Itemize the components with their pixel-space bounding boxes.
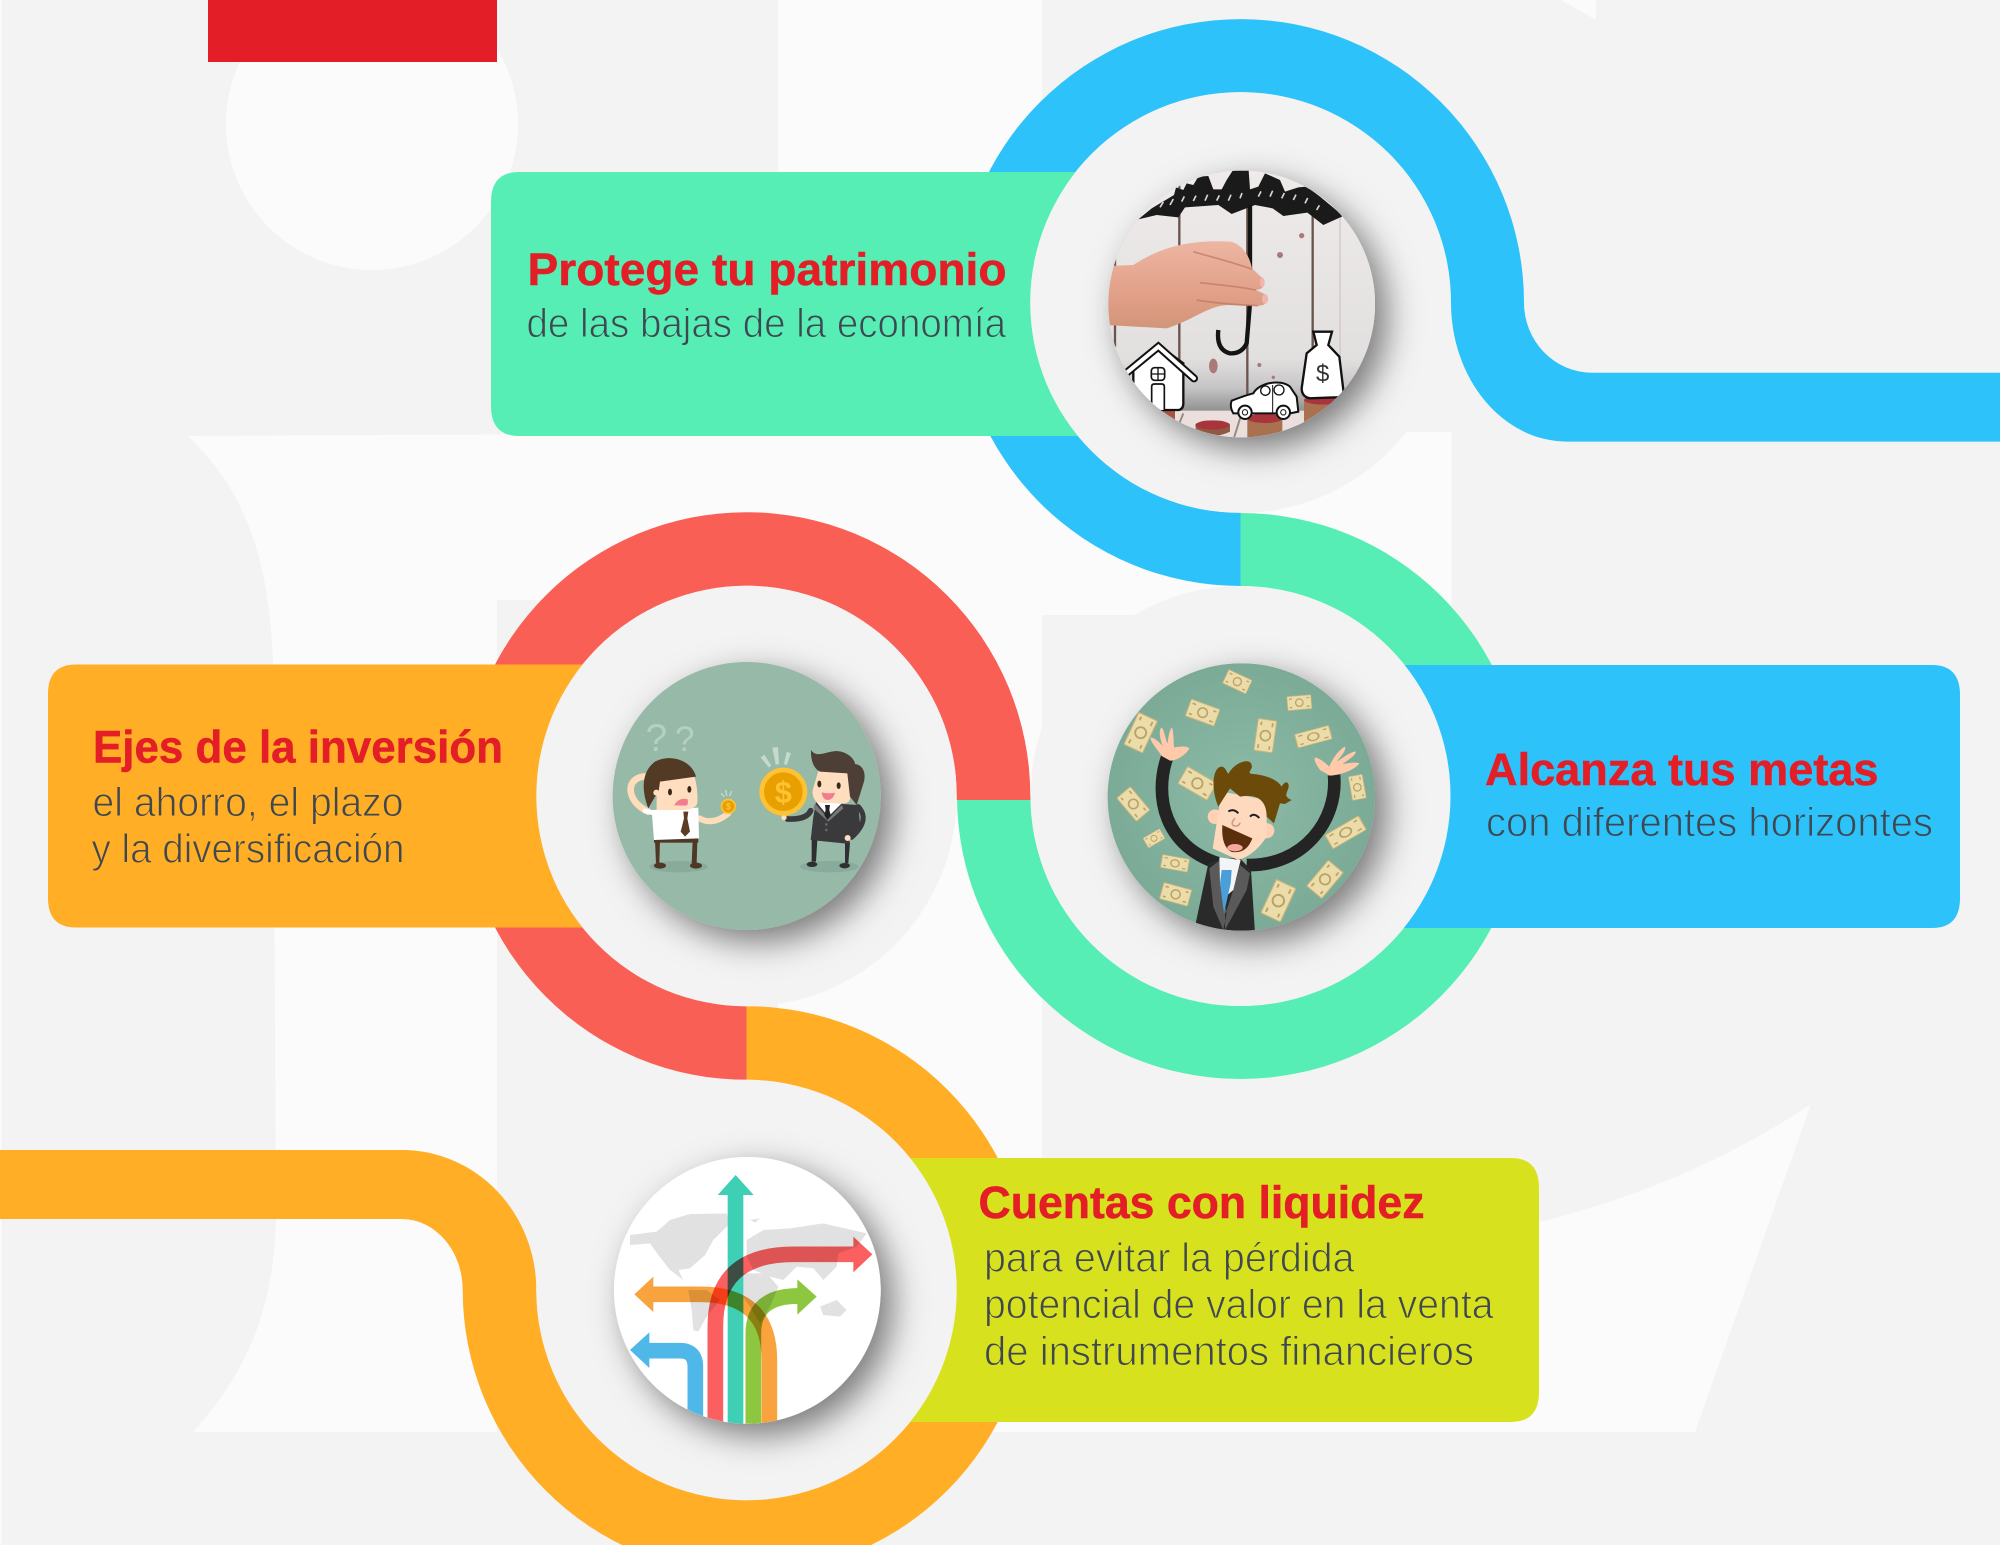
icon detail: question marks: ? xyxy=(675,720,694,759)
icon detail: falling banknotes xyxy=(1117,669,1366,922)
icon: two businessmen comparing coins xyxy=(613,662,881,930)
coral ribbon xyxy=(463,512,1030,1080)
text: cuentas con liquidez: de instrumentos financieros xyxy=(984,1328,1474,1374)
text: protege tu patrimonio xyxy=(526,244,1006,346)
panel: ejes de la inversion tab xyxy=(48,664,746,928)
icon detail: confident man in suit xyxy=(781,750,865,868)
icon detail: orange arrow xyxy=(634,1277,769,1427)
icon detail: world map xyxy=(630,1213,867,1332)
icon: umbrella protecting house, car and money xyxy=(1107,170,1377,441)
icon detail: coin stacks xyxy=(1160,395,1343,438)
text: cuentas con liquidez: potencial de valor en la venta xyxy=(984,1281,1494,1327)
panel: protege tu patrimonio tab xyxy=(491,172,1241,436)
panel: cuentas con liquidez tab xyxy=(746,1158,1539,1422)
icon detail: laughing head xyxy=(1208,761,1292,860)
text: alcanza tus metas xyxy=(1485,744,1933,845)
icon detail: hands xyxy=(1151,727,1359,776)
icon detail: hand xyxy=(1107,241,1268,328)
icon detail: green arrow xyxy=(753,1279,817,1427)
blue ribbon with tail to the right xyxy=(957,19,2000,586)
icon: world map with diverging arrows xyxy=(614,1157,881,1427)
icon detail: teal arrow xyxy=(718,1175,754,1427)
icon detail: small coin: $ xyxy=(726,802,731,812)
text: cuentas con liquidez: para evitar la pérdida xyxy=(984,1234,1355,1280)
text: cuentas con liquidez: Cuentas con liquidez xyxy=(978,1177,1424,1228)
green ribbon xyxy=(957,513,1524,1079)
text: cuentas con liquidez xyxy=(978,1177,1494,1374)
text: ejes de la inversion: Ejes de la inversión xyxy=(93,722,503,773)
icon detail: question marks xyxy=(647,724,694,751)
inner discs of the ribbon loops xyxy=(536,92,1451,1500)
text: protege tu patrimonio: Protege tu patrimonio xyxy=(528,244,1006,295)
red header block xyxy=(208,0,497,62)
icon detail: coral arrow xyxy=(715,1237,872,1427)
icon detail: house xyxy=(1126,345,1194,410)
text: alcanza tus metas: con diferentes horizontes xyxy=(1486,799,1933,845)
icon detail: umbrella xyxy=(1138,171,1343,353)
icon detail: question marks: ? xyxy=(646,717,667,760)
text: ejes de la inversion: el ahorro, el plazo xyxy=(92,779,404,825)
icon detail: small coin xyxy=(721,790,736,814)
icon detail: money bag: $ xyxy=(1316,361,1329,388)
icon: happy man under falling money xyxy=(1108,663,1375,933)
icon detail: large coin xyxy=(759,747,807,816)
icon detail: large coin: $ xyxy=(775,776,792,810)
text: protege tu patrimonio: de las bajas de la economía xyxy=(526,300,1006,346)
icon detail: suit and tie xyxy=(1195,857,1255,933)
icon detail: raised arms xyxy=(1162,757,1334,865)
text: ejes de la inversion: y la diversificación xyxy=(92,826,404,872)
text: ejes de la inversion xyxy=(92,722,503,872)
panel: alcanza tus metas tab xyxy=(1240,665,1960,928)
icon detail: car xyxy=(1231,382,1298,419)
text: alcanza tus metas: Alcanza tus metas xyxy=(1485,744,1878,795)
orange ribbon with tail to the left xyxy=(0,1006,1030,1545)
icon detail: money bag xyxy=(1302,332,1343,398)
icon detail: worried man xyxy=(631,758,728,869)
icon detail: blue arrow xyxy=(630,1332,695,1423)
